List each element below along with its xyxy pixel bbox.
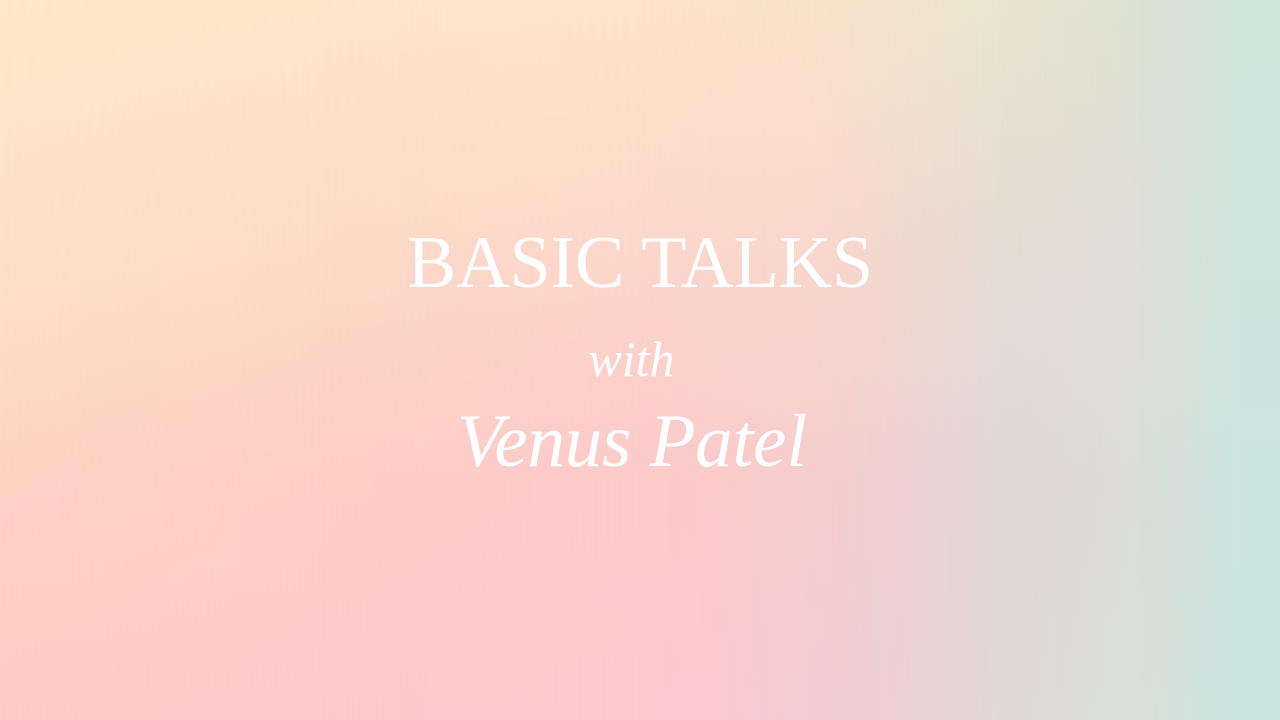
text: with: with (588, 331, 675, 387)
title: BASIC TALKS: BASIC TALKS (407, 222, 873, 304)
presenter name: Venus Patel: Venus Patel (457, 400, 807, 483)
